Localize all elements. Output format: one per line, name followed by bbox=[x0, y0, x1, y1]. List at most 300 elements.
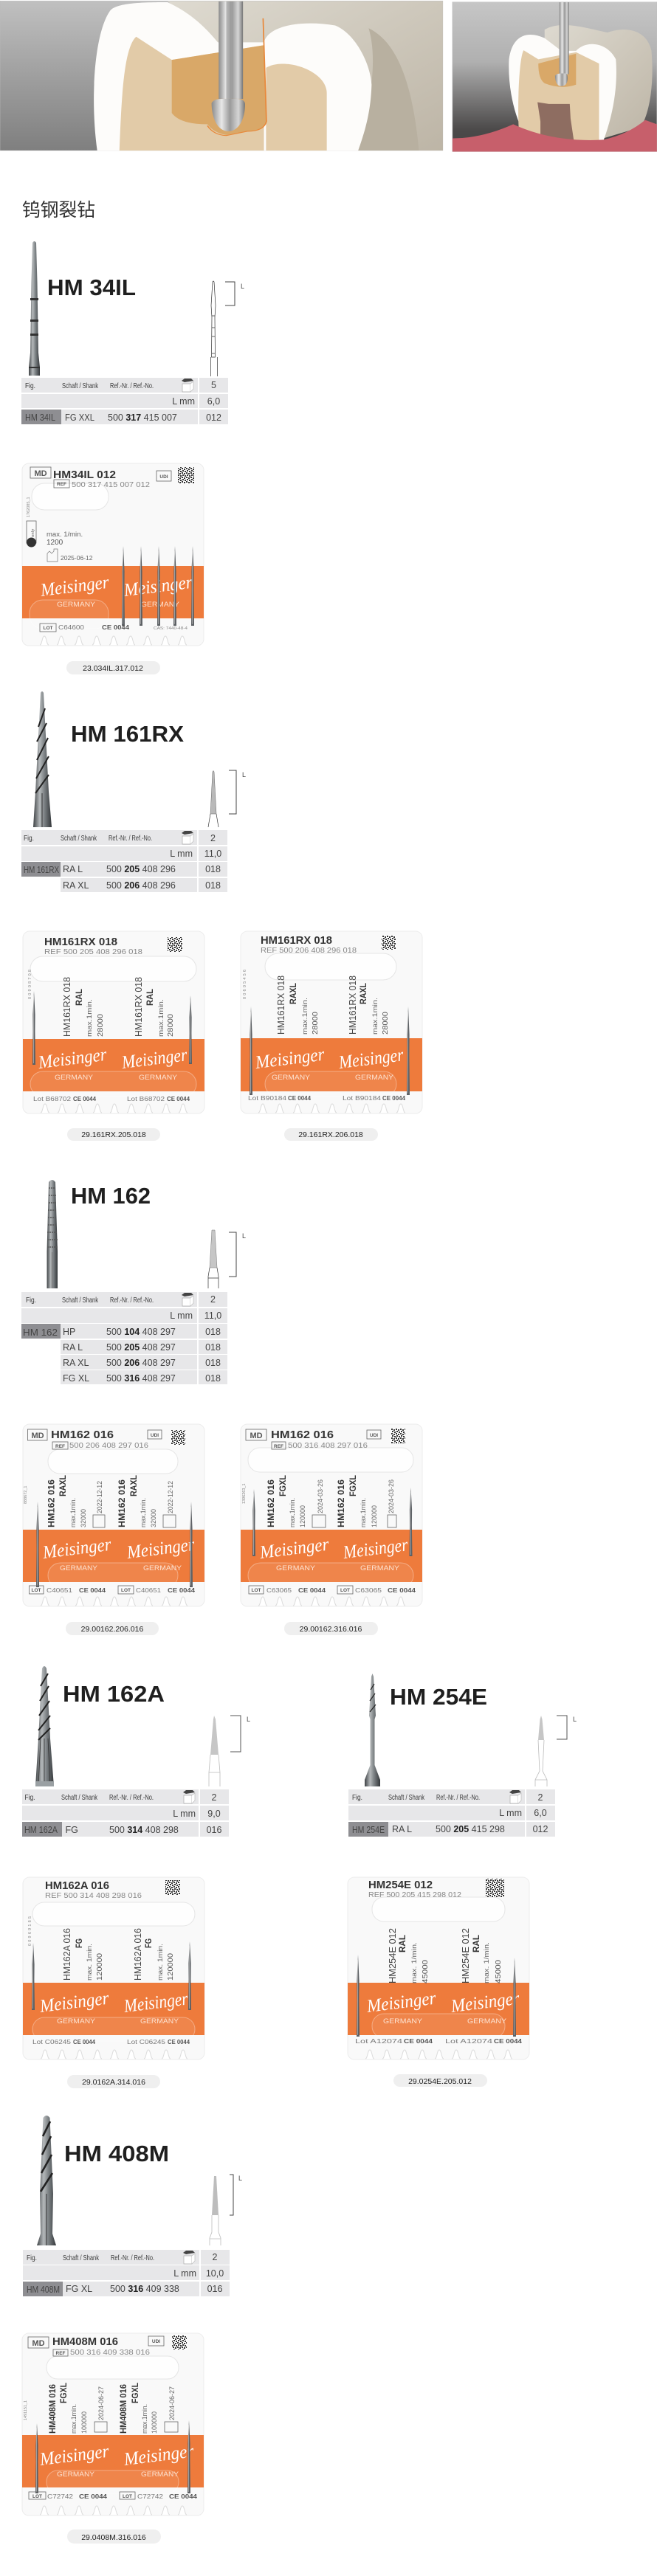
specification table: 500 205 408 297 bbox=[106, 1342, 176, 1353]
specification table: HM 162 bbox=[23, 1327, 58, 1338]
package card: 23.034IL.317.012: HM34IL 012 bbox=[53, 469, 116, 481]
package card: 29.0408M.316.016: LOT bbox=[123, 2494, 132, 2499]
specification table: Schaft / Shank bbox=[63, 2254, 100, 2262]
package card: 29.0162A.314.016: 120000 bbox=[166, 1953, 175, 1981]
package card: 29.0162A.314.016: Lot C06245 bbox=[127, 2038, 165, 2045]
package card: 29.00162.206.016: CE 0044 bbox=[168, 1587, 196, 1594]
hero image: whole tooth with bur bbox=[453, 2, 657, 152]
product title: HM 162 bbox=[71, 1183, 151, 1209]
specification table: 018 bbox=[205, 880, 221, 891]
package card: 29.00162.206.016: CE 0044 bbox=[79, 1587, 106, 1594]
package card: 29.161RX.206.018: CE 0044 bbox=[288, 1095, 312, 1102]
specification table: Schaft / Shank bbox=[62, 381, 99, 390]
specification table: 500 205 408 296 bbox=[106, 864, 176, 874]
specification table: 500 316 409 338 bbox=[110, 2284, 179, 2294]
package card: 29.0408M.316.016: HM408M 016 bbox=[118, 2384, 128, 2434]
package card: 29.161RX.205.018: RAL bbox=[145, 989, 155, 1006]
article number pill bbox=[66, 661, 160, 674]
specification table: 10,0 bbox=[206, 2268, 224, 2279]
specification table: 2 bbox=[212, 1792, 217, 1803]
package card: 29.00162.206.016: GERMANY bbox=[60, 1564, 98, 1572]
package card: 29.161RX.205.018: CE 0044 bbox=[167, 1096, 190, 1102]
package card: 29.0162A.314.016: GERMANY bbox=[57, 2017, 96, 2026]
specification table: 5 bbox=[211, 380, 216, 390]
package card: 29.00162.206.016 bbox=[23, 1424, 204, 1606]
line drawing and length bracket: L bbox=[247, 1716, 250, 1723]
package card: 29.00162.316.016 bbox=[241, 1424, 422, 1606]
specification table: HM 162A bbox=[24, 1825, 58, 1835]
package card: 29.161RX.205.018 bbox=[23, 931, 204, 1113]
package card: 29.161RX.205.018: HM161RX 018 bbox=[134, 977, 144, 1037]
package card: 29.0254E.205.012: HM254E 012 bbox=[368, 1879, 433, 1891]
package card: 29.00162.206.016: C40651 bbox=[136, 1586, 161, 1594]
package card: 29.161RX.206.018: Lot B90184 bbox=[343, 1094, 381, 1102]
package card: 23.034IL.317.012: CAS: 7440-48-4 bbox=[154, 626, 188, 631]
package card: 29.161RX.206.018: REF 500 206 408 296 018 bbox=[261, 947, 357, 955]
package card: 23.034IL.317.012: GERMANY bbox=[141, 601, 180, 609]
package card: 29.00162.316.016: 120000 bbox=[371, 1505, 378, 1527]
specification table: Fig. bbox=[26, 1296, 36, 1305]
article number pill bbox=[67, 1128, 160, 1141]
line drawing and length bracket bbox=[535, 1716, 577, 1786]
line drawing and length bracket bbox=[211, 281, 244, 376]
package card: 23.034IL.317.012: C64600 bbox=[58, 624, 84, 631]
package card: 29.0408M.316.016: FGXL bbox=[58, 2383, 69, 2403]
package card: 29.00162.206.016: 32000 bbox=[80, 1509, 87, 1527]
line drawing and length bracket: L bbox=[241, 283, 244, 290]
specification table: Schaft / Shank bbox=[62, 1296, 99, 1305]
line drawing and length bracket bbox=[208, 1230, 246, 1288]
package card: 29.161RX.206.018: HM161RX 018 bbox=[348, 976, 358, 1035]
package card: 23.034IL.317.012: REF bbox=[57, 482, 66, 487]
package card: 29.00162.206.016: 500 206 408 297 016 bbox=[69, 1442, 148, 1450]
package card: 29.0408M.316.016: 100000 bbox=[151, 2411, 158, 2434]
specification table: Fig. bbox=[25, 1793, 35, 1802]
package card: 23.034IL.317.012: Meisinger bbox=[39, 573, 110, 601]
package card: 29.00162.206.016: HM162 016 bbox=[51, 1429, 114, 1441]
package card: 29.161RX.205.018: GERMANY bbox=[55, 1074, 94, 1082]
package card: 29.0162A.314.016: HM162A 016 bbox=[133, 1928, 143, 1981]
specification table: 2 bbox=[210, 833, 216, 843]
package card: 29.0162A.314.016: Meisinger bbox=[123, 1989, 189, 2017]
package card: 29.161RX.206.018: 00605456 bbox=[243, 970, 247, 999]
section: HM 162 bbox=[21, 1180, 422, 1635]
specification table: 6,0 bbox=[207, 396, 220, 407]
package card: 29.00162.316.016: HM162 016 bbox=[271, 1429, 334, 1441]
specification table: 2 bbox=[210, 1294, 216, 1305]
product title: HM 161RX bbox=[71, 721, 184, 747]
specification table: 018 bbox=[205, 1373, 221, 1384]
bur photo: HM 162 bbox=[47, 1180, 58, 1288]
specification table: Schaft / Shank bbox=[388, 1793, 425, 1802]
package card: 29.0408M.316.016: max.1min. bbox=[141, 2404, 148, 2434]
package card: 29.161RX.206.018: CE 0044 bbox=[382, 1095, 406, 1102]
article number pill: 29.00162.316.016 bbox=[300, 1625, 362, 1634]
package card: 23.034IL.317.012: max. 1/min. bbox=[47, 531, 83, 539]
package card: 29.00162.316.016: UDI bbox=[370, 1433, 378, 1438]
specification table: Fig. bbox=[24, 834, 34, 843]
specification table: 11,0 bbox=[204, 1311, 221, 1321]
package card: 29.0254E.205.012: max. 1/min. bbox=[410, 1942, 418, 1983]
article number pill: 29.161RX.206.018 bbox=[298, 1130, 363, 1139]
package card: 29.0254E.205.012: RAL bbox=[397, 1935, 407, 1952]
package card: 29.00162.316.016: LOT bbox=[340, 1588, 350, 1593]
package card: 29.00162.316.016: HM162 016 bbox=[336, 1479, 346, 1527]
bur photo: HM 161RX bbox=[33, 691, 52, 827]
package card: 29.161RX.205.018: GERMANY bbox=[139, 1074, 178, 1082]
specification table: 500 205 415 298 bbox=[436, 1824, 505, 1834]
bur photo: HM 254E bbox=[365, 1674, 380, 1786]
specification table: HM 408M bbox=[27, 2285, 60, 2295]
package card: 29.0254E.205.012: Lot A12074 bbox=[355, 2037, 402, 2045]
package card: 29.00162.316.016: C63065 bbox=[266, 1586, 292, 1594]
package card: 29.161RX.206.018: 28000 bbox=[311, 1012, 320, 1035]
package card: 29.00162.206.016: MD bbox=[31, 1432, 44, 1440]
specification table: FG XL bbox=[66, 2284, 92, 2294]
package card: 29.00162.206.016: max.1min. bbox=[140, 1498, 147, 1527]
package card: 29.0254E.205.012: Lot A12074 bbox=[445, 2037, 492, 2045]
specification table: 018 bbox=[205, 864, 221, 874]
article number pill bbox=[67, 2530, 161, 2544]
package card: 29.0408M.316.016: 100000 bbox=[80, 2411, 88, 2434]
package card: 29.161RX.205.018: Lot B68702 bbox=[33, 1095, 71, 1102]
package card: 29.0162A.314.016 bbox=[23, 1877, 204, 2059]
specification table bbox=[21, 378, 228, 424]
specification table: Fig. bbox=[352, 1793, 362, 1802]
product title: HM 254E bbox=[390, 1684, 487, 1710]
article number pill bbox=[284, 1622, 378, 1635]
package card: 29.00162.206.016: 32000 bbox=[150, 1509, 157, 1527]
package card: 29.00162.206.016: LOT bbox=[31, 1588, 41, 1593]
package card: 29.161RX.206.018: GERMANY bbox=[272, 1074, 311, 1082]
product title: HM 34IL bbox=[47, 274, 136, 300]
product title: HM 162A bbox=[63, 1681, 165, 1707]
line drawing and length bracket: L bbox=[573, 1716, 577, 1723]
specification table: 9,0 bbox=[207, 1809, 221, 1819]
specification table: L mm bbox=[173, 2268, 196, 2279]
section: HM 34IL bbox=[21, 241, 244, 674]
package card: 29.161RX.205.018: HM161RX 018 bbox=[62, 977, 72, 1037]
package card: 29.00162.206.016: LOT bbox=[121, 1588, 131, 1593]
package card: 29.00162.316.016: Meisinger bbox=[258, 1535, 330, 1563]
bur photo: HM 408M bbox=[37, 2116, 56, 2245]
specification table: Schaft / Shank bbox=[61, 1793, 98, 1802]
package card: 29.161RX.205.018: REF 500 205 408 296 018 bbox=[44, 948, 142, 956]
package card: 29.161RX.205.018: max.1min. bbox=[86, 999, 93, 1037]
package card: 29.0408M.316.016: UDI bbox=[152, 2339, 160, 2344]
specification table: RA XL bbox=[63, 1358, 89, 1368]
package card: 29.0408M.316.016: 1491151_1 bbox=[24, 2400, 28, 2420]
package card: 29.00162.316.016: C63065 bbox=[355, 1586, 382, 1594]
specification table: Schaft / Shank bbox=[61, 834, 97, 843]
package card: 29.00162.316.016: HM162 016 bbox=[266, 1479, 276, 1527]
package card: 29.0254E.205.012: GERMANY bbox=[383, 2017, 423, 2026]
article number pill: 29.161RX.205.018 bbox=[81, 1130, 146, 1139]
specification table bbox=[23, 2250, 230, 2296]
package card: 29.00162.316.016: 2024-03-26 bbox=[388, 1479, 395, 1513]
package card: 29.0254E.205.012: RAL bbox=[471, 1935, 481, 1952]
specification table: 500 317 415 007 bbox=[108, 412, 177, 423]
package card: 29.161RX.205.018: Meisinger bbox=[120, 1045, 188, 1073]
package card: 29.161RX.206.018: HM161RX 018 bbox=[261, 934, 332, 947]
package card: 29.0254E.205.012: Meisinger bbox=[450, 1989, 520, 2017]
package card: 29.00162.316.016: Meisinger bbox=[342, 1535, 409, 1563]
article number pill: 23.034IL.317.012 bbox=[83, 664, 143, 673]
product title: HM 408M bbox=[64, 2141, 169, 2166]
specification table: Ref.-Nr. / Ref.-No. bbox=[436, 1793, 480, 1802]
package card: 29.161RX.205.018: HM161RX 018 bbox=[44, 936, 117, 948]
package card: 29.161RX.205.018: Lot B68702 bbox=[127, 1095, 165, 1102]
package card: 29.161RX.206.018: max.1min. bbox=[301, 998, 309, 1035]
package card: 29.161RX.205.018: CE 0044 bbox=[73, 1096, 97, 1102]
specification table: RA L bbox=[63, 864, 83, 874]
package card: 29.161RX.206.018: Meisinger bbox=[254, 1045, 326, 1073]
package card: 29.00162.316.016: max.1min. bbox=[360, 1498, 367, 1527]
package card: 29.0408M.316.016: MD bbox=[32, 2339, 45, 2348]
page heading: 钨钢裂钻 bbox=[22, 200, 95, 221]
package card: 23.034IL.317.012 bbox=[22, 463, 204, 646]
article number pill bbox=[66, 1622, 159, 1635]
specification table bbox=[21, 1292, 227, 1384]
package card: 29.0162A.314.016: HM162A 016 bbox=[62, 1928, 72, 1981]
article number pill bbox=[393, 2074, 487, 2087]
package card: 29.161RX.206.018: max.1min. bbox=[371, 998, 379, 1035]
specification table: 500 206 408 297 bbox=[106, 1358, 176, 1368]
package card: 29.0408M.316.016: 500 316 409 338 016 bbox=[70, 2349, 150, 2357]
package card: 29.0254E.205.012: 45000 bbox=[421, 1960, 430, 1983]
specification table: HM 254E bbox=[352, 1825, 385, 1835]
specification table: 018 bbox=[205, 1327, 221, 1337]
specification table: 018 bbox=[205, 1342, 221, 1353]
specification table: L mm bbox=[172, 396, 195, 407]
specification table: FG XL bbox=[63, 1373, 89, 1384]
package card: 29.00162.316.016: 1396263_1 bbox=[242, 1483, 247, 1504]
package card: 29.0162A.314.016: REF 500 314 408 298 016 bbox=[45, 1892, 142, 1900]
specification table: 018 bbox=[205, 1358, 221, 1368]
package card: 29.0254E.205.012: HM254E 012 bbox=[461, 1928, 471, 1983]
package card: 29.0254E.205.012: CE 0044 bbox=[494, 2038, 523, 2045]
package card: 29.00162.206.016: C40651 bbox=[47, 1586, 72, 1594]
section: HM 161RX bbox=[21, 691, 422, 1141]
specification table: HM 161RX bbox=[24, 865, 60, 875]
package card: 29.0162A.314.016: Meisinger bbox=[38, 1989, 110, 2017]
line drawing and length bracket bbox=[209, 1716, 250, 1786]
package card: 29.0162A.314.016: CE 0044 bbox=[73, 2039, 96, 2045]
package card: 29.161RX.206.018: Lot B90184 bbox=[248, 1094, 286, 1102]
package card: 23.034IL.317.012: 500 317 415 007 012 bbox=[72, 481, 150, 489]
package card: 29.0254E.205.012: CE 0044 bbox=[404, 2038, 433, 2045]
package card: 29.00162.206.016: RAXL bbox=[128, 1475, 139, 1496]
specification table: Ref.-Nr. / Ref.-No. bbox=[109, 834, 152, 843]
package card: 29.00162.316.016: LOT bbox=[251, 1588, 261, 1593]
section: HM 254E bbox=[348, 1674, 577, 2087]
package card: 29.0162A.314.016: FG bbox=[143, 1938, 154, 1948]
specification table: HM 34IL bbox=[25, 412, 55, 423]
package card: 29.161RX.206.018: 28000 bbox=[381, 1012, 390, 1035]
package card: 29.0162A.314.016: max. 1min. bbox=[156, 1944, 164, 1981]
package card: 23.034IL.317.012: GERMANY bbox=[57, 601, 96, 609]
package card: 29.00162.206.016: 2022-12-12 bbox=[167, 1481, 174, 1513]
package card: 29.00162.316.016: MD bbox=[250, 1432, 263, 1440]
package card: 29.0408M.316.016: Meisinger bbox=[38, 2442, 110, 2470]
specification table bbox=[22, 1789, 229, 1837]
package card: 29.00162.316.016: FGXL bbox=[348, 1475, 358, 1496]
package card: 29.00162.206.016: 888672_1 bbox=[24, 1486, 28, 1504]
package card: 29.0408M.316.016: FGXL bbox=[130, 2383, 140, 2403]
line drawing and length bracket bbox=[208, 770, 246, 827]
specification table bbox=[21, 830, 227, 892]
package card: 29.0162A.314.016: max. 1min. bbox=[86, 1944, 93, 1981]
bur photo: HM 162A bbox=[35, 1666, 54, 1786]
package card: 29.0162A.314.016: 120000 bbox=[95, 1953, 104, 1981]
line drawing and length bracket: L bbox=[242, 1232, 246, 1240]
specification table: 016 bbox=[207, 1825, 221, 1835]
section: HM 408M bbox=[22, 2116, 242, 2544]
specification table bbox=[348, 1789, 555, 1837]
line drawing and length bracket: L bbox=[242, 771, 246, 778]
package card: 29.0254E.205.012 bbox=[348, 1877, 529, 2059]
package card: 29.00162.316.016: 2024-03-26 bbox=[317, 1479, 324, 1513]
package card: 29.0162A.314.016: CE 0044 bbox=[168, 2039, 190, 2045]
package card: 29.00162.316.016: CE 0044 bbox=[298, 1587, 326, 1594]
package card: 29.161RX.205.018: 28000 bbox=[96, 1014, 105, 1037]
package card: 29.0408M.316.016: 2024-06-27 bbox=[97, 2386, 105, 2420]
package card: 29.0162A.314.016: Lot C06245 bbox=[32, 2038, 71, 2045]
package card: 29.0254E.205.012: REF 500 205 415 298 012 bbox=[368, 1891, 461, 1899]
hero image: tooth cavity close-up bbox=[0, 1, 443, 151]
specification table: 012 bbox=[206, 412, 221, 423]
package card: 29.0254E.205.012: 45000 bbox=[494, 1960, 503, 1983]
specification table: L mm bbox=[170, 849, 193, 859]
package card: 29.161RX.205.018: RAL bbox=[74, 989, 84, 1006]
article number pill: 29.0162A.314.016 bbox=[82, 2078, 145, 2087]
package card: 29.0408M.316.016: LOT bbox=[32, 2494, 42, 2499]
specification table: 016 bbox=[207, 2284, 222, 2294]
package card: 29.161RX.206.018: HM161RX 018 bbox=[276, 976, 286, 1035]
specification table: RA L bbox=[392, 1824, 412, 1834]
package card: 29.00162.316.016: max.1min. bbox=[289, 1498, 296, 1527]
package card: 29.0254E.205.012: HM254E 012 bbox=[388, 1928, 398, 1983]
package card: 23.034IL.317.012: Meisinger bbox=[123, 573, 193, 601]
article number pill bbox=[284, 1128, 378, 1141]
package card: 29.0408M.316.016: GERMANY bbox=[57, 2470, 95, 2479]
specification table: FG XXL bbox=[65, 412, 94, 423]
specification table: 500 206 408 296 bbox=[106, 880, 176, 891]
package card: 29.0254E.205.012: Meisinger bbox=[365, 1989, 437, 2017]
package card: 29.0408M.316.016: GERMANY bbox=[141, 2470, 179, 2479]
specification table: FG bbox=[65, 1825, 78, 1835]
package card: 29.0408M.316.016: HM408M 016 bbox=[52, 2335, 118, 2348]
specification table: Ref.-Nr. / Ref.-No. bbox=[110, 1296, 154, 1305]
package card: 29.00162.206.016: max.1min. bbox=[69, 1498, 77, 1527]
package card: 29.0408M.316.016: CE 0044 bbox=[169, 2493, 198, 2500]
specification table: 11,0 bbox=[204, 849, 221, 859]
package card: 29.00162.206.016: GERMANY bbox=[143, 1564, 182, 1572]
package card: 29.00162.316.016: REF bbox=[274, 1444, 283, 1449]
package card: 29.161RX.206.018: GERMANY bbox=[355, 1074, 394, 1082]
package card: 29.00162.206.016: 2022-12-12 bbox=[96, 1481, 103, 1513]
package card: 23.034IL.317.012: LOT bbox=[43, 626, 53, 631]
package card: 29.00162.206.016: HM162 016 bbox=[117, 1479, 127, 1527]
package card: 29.0408M.316.016: C72742 bbox=[47, 2493, 73, 2500]
package card: 29.0408M.316.016 bbox=[22, 2333, 204, 2515]
specification table: 500 314 408 298 bbox=[109, 1825, 179, 1835]
package card: 23.034IL.317.012: 1762085_1 bbox=[27, 497, 31, 517]
package card: 29.00162.316.016: GERMANY bbox=[276, 1564, 316, 1572]
specification table: 500 316 408 297 bbox=[106, 1373, 176, 1384]
package card: 23.034IL.317.012: CE 0044 bbox=[102, 624, 130, 631]
package card: 29.161RX.205.018: 28000 bbox=[166, 1014, 175, 1037]
package card: 29.00162.206.016: UDI bbox=[151, 1433, 159, 1438]
line drawing and length bracket: L bbox=[238, 2175, 242, 2182]
specification table: 6,0 bbox=[534, 1808, 547, 1818]
specification table: 2 bbox=[213, 2252, 218, 2262]
package card: 29.161RX.205.018: Meisinger bbox=[37, 1045, 108, 1073]
package card: 29.00162.316.016: 120000 bbox=[299, 1505, 306, 1527]
specification table: HP bbox=[63, 1327, 75, 1337]
specification table: Ref.-Nr. / Ref.-No. bbox=[111, 2254, 154, 2262]
specification table: L mm bbox=[173, 1809, 196, 1819]
package card: 29.00162.206.016: RAXL bbox=[58, 1475, 68, 1496]
article number pill bbox=[67, 2075, 160, 2088]
package card: 23.034IL.317.012: MD bbox=[34, 469, 47, 478]
section: HM 162A bbox=[22, 1666, 250, 2088]
package card: 29.161RX.206.018: RAXL bbox=[358, 983, 368, 1004]
package card: 29.0408M.316.016: C72742 bbox=[137, 2493, 163, 2500]
package card: 23.034IL.317.012: 1200 bbox=[47, 539, 63, 547]
article number pill: 29.0254E.205.012 bbox=[408, 2077, 472, 2086]
package card: 29.0162A.314.016: FG bbox=[74, 1938, 84, 1948]
package card: 29.0408M.316.016: REF bbox=[56, 2351, 66, 2356]
package card: 29.0408M.316.016: Meisinger bbox=[123, 2442, 195, 2470]
package card: 29.00162.316.016: 500 316 408 297 016 bbox=[288, 1442, 368, 1450]
package card: 29.0162A.314.016: GERMANY bbox=[140, 2017, 179, 2026]
package card: 23.034IL.317.012: UDI bbox=[159, 474, 168, 480]
specification table: Fig. bbox=[25, 381, 35, 390]
package card: 29.00162.206.016: REF bbox=[55, 1444, 65, 1449]
package card: 29.0162A.314.016: 00969185 bbox=[28, 1916, 32, 1946]
package card: 29.0254E.205.012: max. 1/min. bbox=[483, 1942, 490, 1983]
specification table: Ref.-Nr. / Ref.-No. bbox=[109, 1793, 154, 1802]
specification table: Fig. bbox=[27, 2254, 37, 2262]
line drawing and length bracket bbox=[210, 2175, 242, 2245]
package card: 29.0254E.205.012: GERMANY bbox=[467, 2017, 507, 2026]
package card: 29.0408M.316.016: HM408M 016 bbox=[47, 2384, 58, 2434]
specification table: RA L bbox=[63, 1342, 83, 1353]
specification table: L mm bbox=[170, 1311, 193, 1321]
package card: 29.0408M.316.016: CE 0044 bbox=[79, 2493, 108, 2500]
specification table: 012 bbox=[533, 1824, 548, 1834]
specification table: RA XL bbox=[63, 880, 89, 891]
package card: 29.161RX.206.018 bbox=[241, 931, 422, 1113]
specification table: 500 104 408 297 bbox=[106, 1327, 176, 1337]
package card: 29.161RX.205.018: 00908708 bbox=[28, 970, 32, 999]
package card: 29.161RX.206.018: RAXL bbox=[288, 983, 298, 1004]
package card: 29.0162A.314.016: HM162A 016 bbox=[45, 1879, 109, 1892]
article number pill: 29.00162.206.016 bbox=[81, 1625, 143, 1634]
bur photo: HM 34IL bbox=[29, 241, 40, 376]
package card: 23.034IL.317.012: only bbox=[31, 528, 35, 537]
package card: 29.00162.206.016: Meisinger bbox=[125, 1535, 196, 1563]
package card: 29.00162.316.016: FGXL bbox=[278, 1475, 288, 1496]
package card: 29.161RX.206.018: Meisinger bbox=[337, 1045, 405, 1073]
package card: 23.034IL.317.012: 2025-06-12 bbox=[61, 554, 93, 562]
specification table: Ref.-Nr. / Ref.-No. bbox=[110, 381, 154, 390]
package card: 29.0408M.316.016: 2024-06-27 bbox=[168, 2386, 176, 2420]
specification table: L mm bbox=[499, 1808, 522, 1818]
package card: 29.161RX.205.018: max.1min. bbox=[157, 999, 165, 1037]
specification table: 2 bbox=[538, 1792, 543, 1803]
